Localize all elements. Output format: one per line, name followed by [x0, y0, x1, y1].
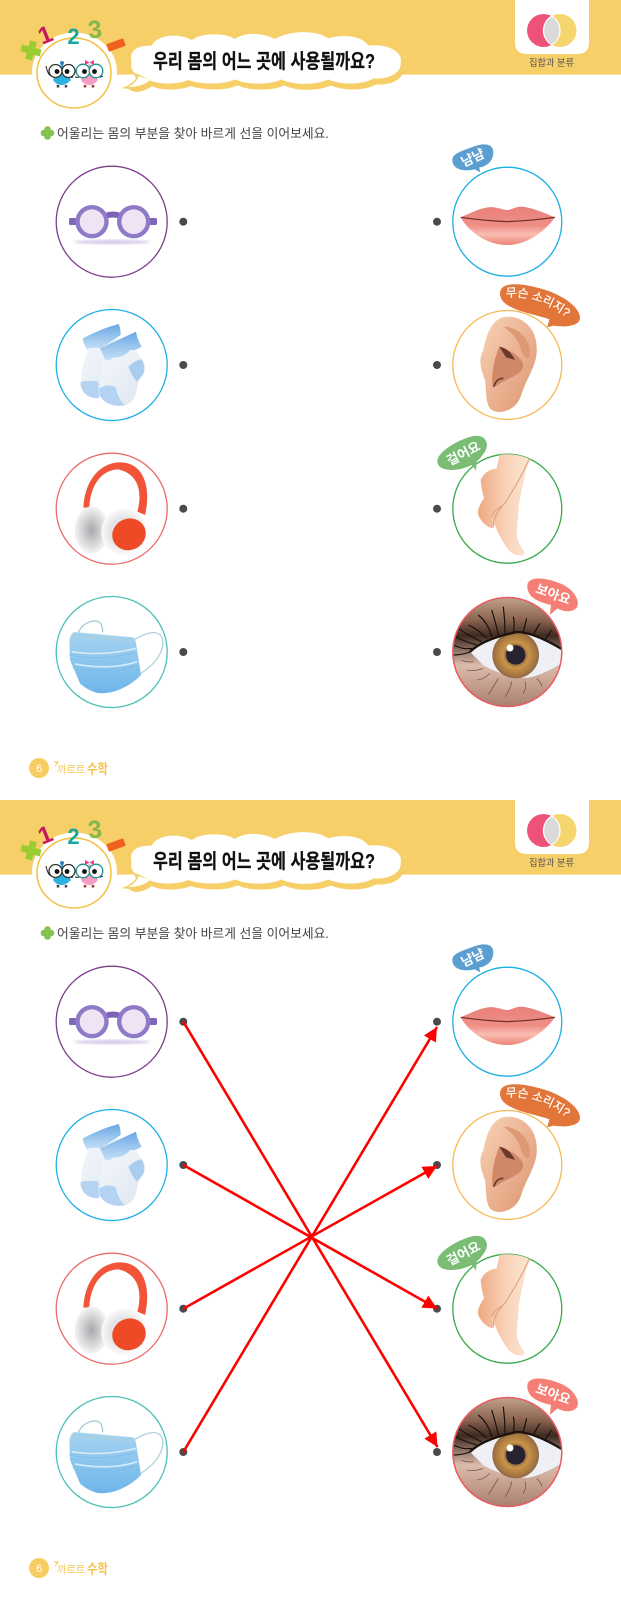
- right connection dots: [433, 218, 441, 656]
- item: earmuffs (answer): [56, 1253, 167, 1364]
- body part: feet with bubble (answer): [437, 1236, 562, 1363]
- footer page number: 수학: [87, 761, 108, 777]
- body part: ear with bubble (answer): 무슨 소리지?: [506, 1087, 570, 1116]
- body part: feet with bubble: 걸어요: [444, 438, 483, 469]
- page 2: answer worksheet: [0, 800, 621, 1578]
- body part: eye with bubble: [450, 579, 578, 708]
- body part: lips with bubble: [452, 144, 562, 276]
- instruction (answer): 어울리는 몸의 부분을 찾아 바르게 선을 이어보세요.: [57, 926, 329, 941]
- header band with title: [0, 0, 621, 112]
- item: earmuffs: [56, 453, 167, 564]
- instruction: 어울리는 몸의 부분을 찾아 바르게 선을 이어보세요.: [57, 126, 329, 141]
- footer page number (answer): 까르르: [57, 1564, 85, 1576]
- footer page number (answer): 수학: [87, 1561, 108, 1577]
- footer page number (answer): [29, 1558, 108, 1578]
- body part: feet with bubble: [437, 436, 562, 563]
- item: socks: [56, 310, 167, 420]
- footer page number: [29, 758, 108, 778]
- body part: lips with bubble (answer): [452, 944, 562, 1076]
- footer page number (answer): 6: [36, 1563, 42, 1575]
- item: face mask (answer): [56, 1396, 167, 1508]
- body part: eye with bubble (answer): 보아요: [534, 1381, 573, 1407]
- left connection dots: [179, 218, 187, 656]
- header band with title (answer): [0, 800, 621, 912]
- item: socks (answer): [56, 1110, 167, 1220]
- footer page number: 까르르: [57, 764, 85, 776]
- body part: eye with bubble (answer): [450, 1379, 578, 1508]
- answer arrows: [183, 1022, 438, 1452]
- body part: ear with bubble: [452, 284, 580, 420]
- body part: eye with bubble: 보아요: [534, 581, 573, 607]
- item: glasses (answer): [56, 966, 167, 1077]
- body part: ear with bubble: 무슨 소리지?: [506, 287, 570, 316]
- body part: feet with bubble (answer): 걸어요: [444, 1238, 483, 1269]
- footer page number: 6: [36, 763, 42, 775]
- item: face mask: [56, 596, 167, 708]
- body part: lips with bubble: 냠냠: [459, 146, 487, 170]
- right connection dots (answer): [433, 1018, 441, 1456]
- item: glasses: [56, 166, 167, 277]
- left connection dots (answer): [179, 1018, 187, 1456]
- body part: ear with bubble (answer): [452, 1084, 580, 1220]
- body part: lips with bubble (answer): 냠냠: [459, 946, 487, 970]
- page 1: question worksheet: [0, 0, 621, 778]
